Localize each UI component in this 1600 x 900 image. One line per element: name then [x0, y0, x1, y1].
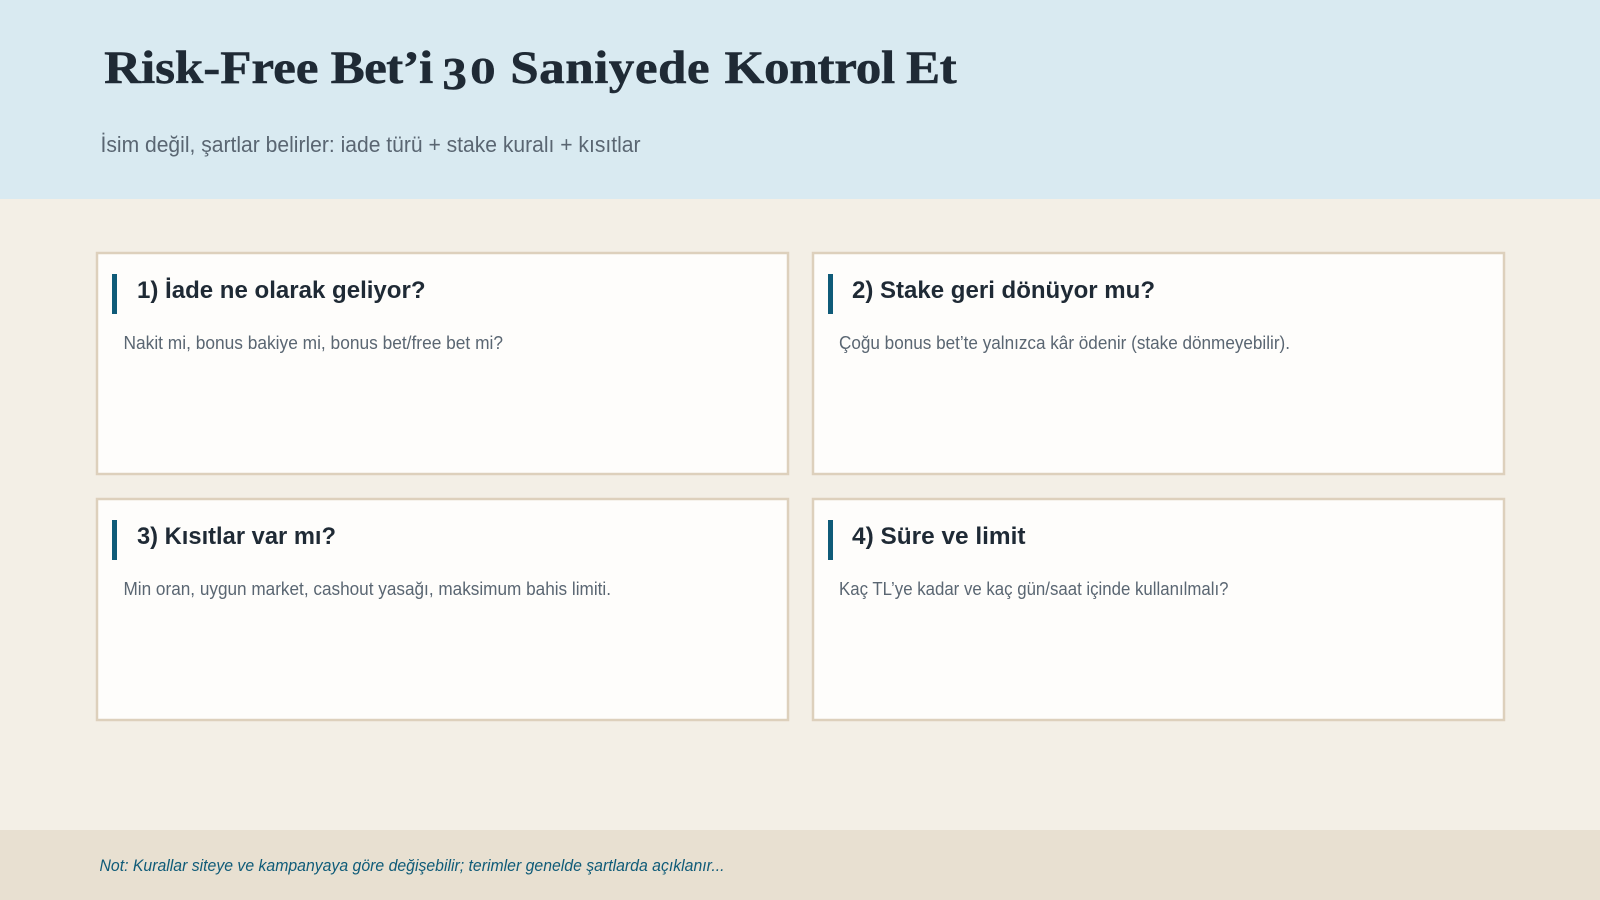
heading 4: 4) Süre ve limit: [852, 523, 1026, 550]
footer band: [0, 830, 1600, 900]
body 2: Çoğu bonus bet’te yalnızca kâr ödenir (stake dönmeyebilir).: [839, 333, 1290, 353]
panel: card 3: [97, 499, 788, 720]
header band: [0, 0, 1600, 199]
footer note: Not: Kurallar siteye ve kampanyaya göre değişebilir; terimler genelde şartlarda açıklanır...: [100, 856, 724, 875]
body 3: Min oran, uygun market, cashout yasağı, maksimum bahis limiti.: [124, 579, 611, 599]
title: Et: [906, 41, 957, 94]
panel: card 2: [813, 253, 1504, 474]
heading 1: 1) İade ne olarak geliyor?: [137, 277, 425, 304]
title: Risk-Free: [104, 41, 318, 94]
heading 3: 3) Kısıtlar var mı?: [137, 523, 336, 550]
panel: card 1: [97, 253, 788, 474]
title: 0: [470, 53, 495, 92]
title: Bet’i: [331, 41, 433, 94]
accent bar 1: [112, 274, 117, 314]
title: Kontrol: [725, 41, 895, 94]
title: 3: [442, 50, 467, 100]
title: Saniyede: [510, 41, 710, 94]
panel: card 4: [813, 499, 1504, 720]
heading 2: 2) Stake geri dönüyor mu?: [852, 277, 1155, 304]
accent bar 4: [828, 520, 833, 560]
body 1: Nakit mi, bonus bakiye mi, bonus bet/free bet mi?: [124, 333, 503, 353]
body 4: Kaç TL’ye kadar ve kaç gün/saat içinde kullanılmalı?: [839, 579, 1228, 599]
accent bar 2: [828, 274, 833, 314]
accent bar 3: [112, 520, 117, 560]
subtitle: İsim değil, şartlar belirler: iade türü + stake kuralı + kısıtlar: [100, 132, 640, 157]
